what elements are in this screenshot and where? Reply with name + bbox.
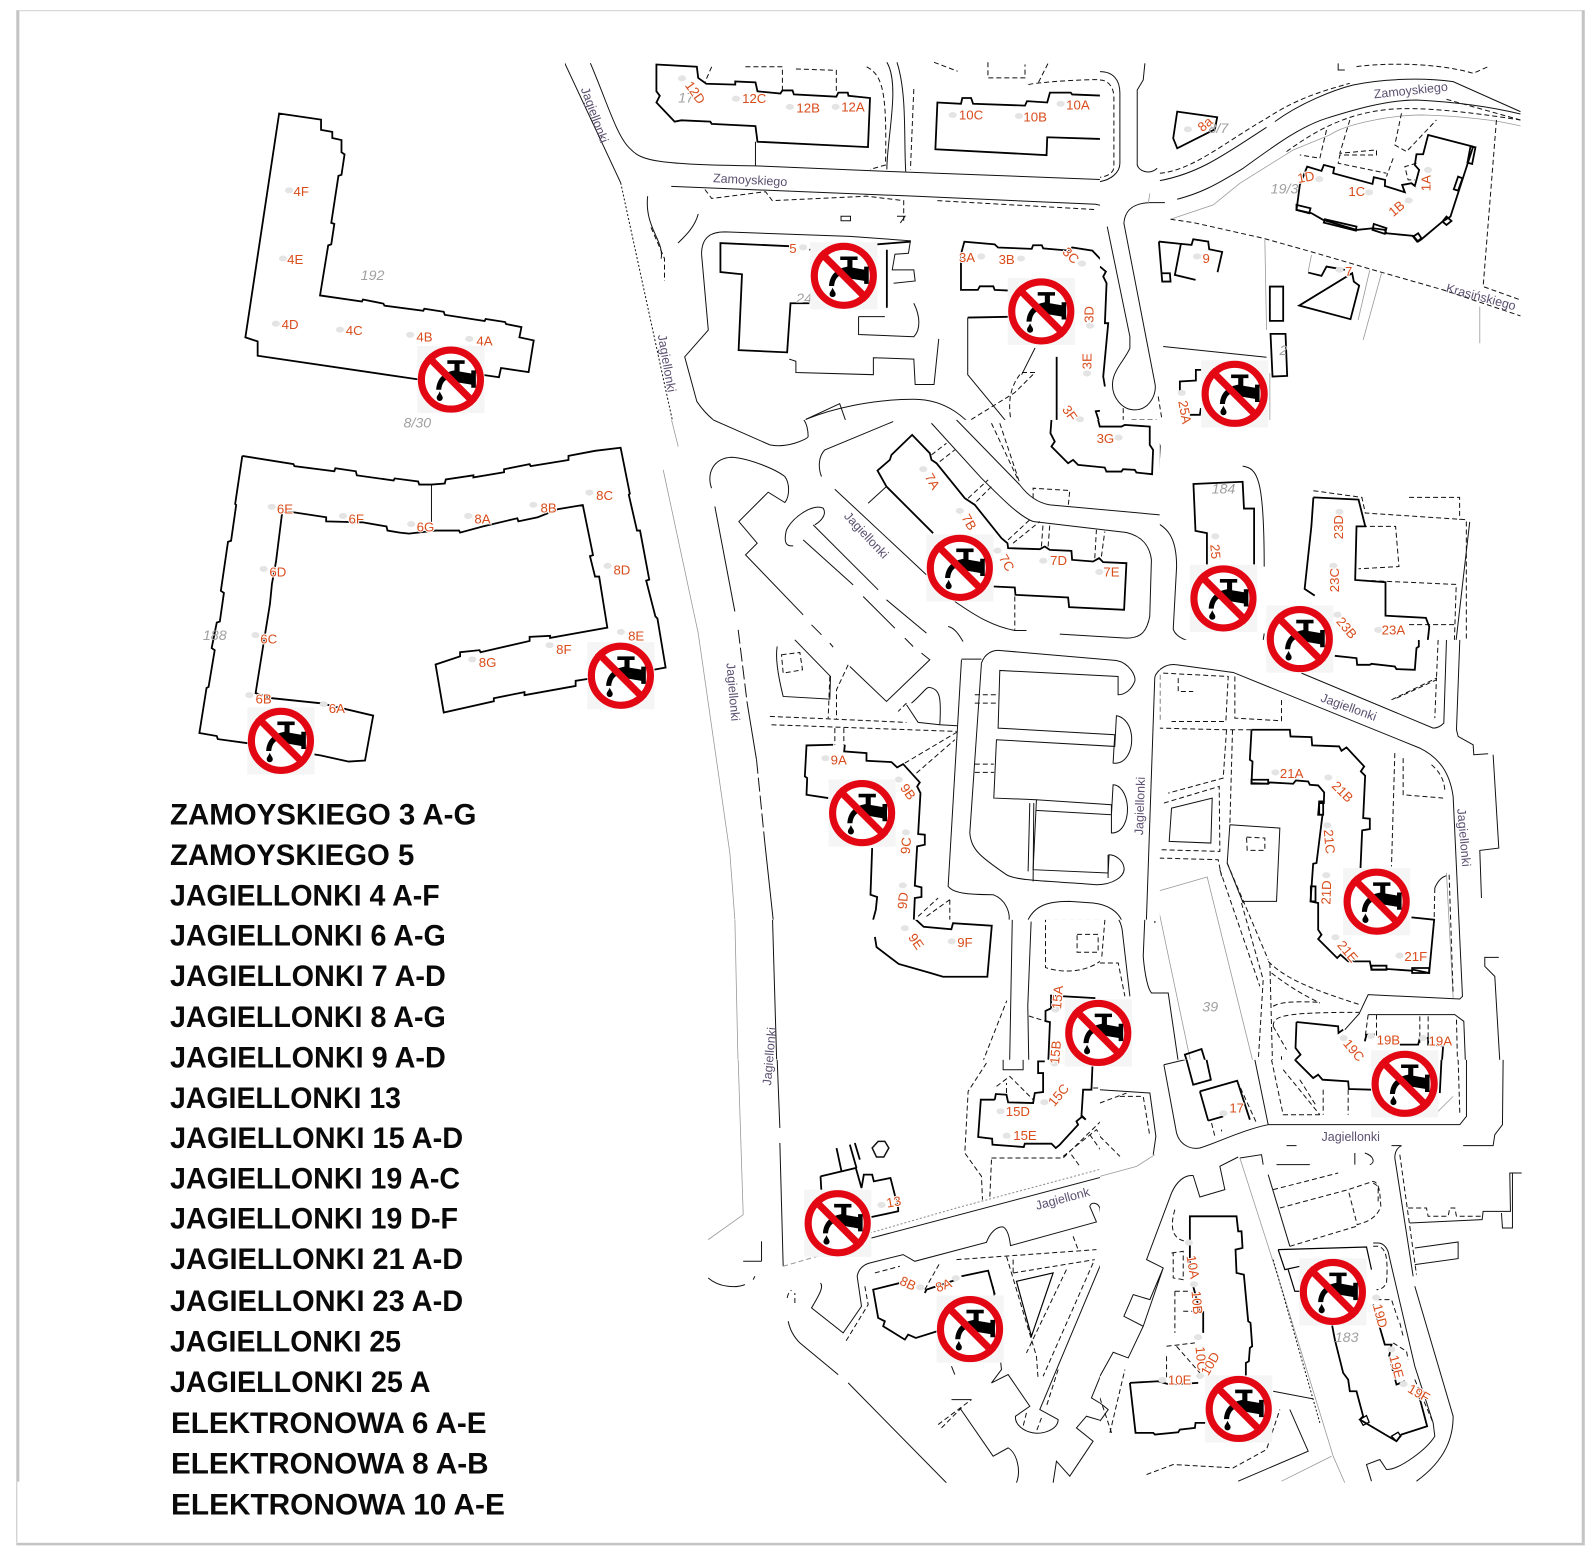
street names: Jagiellonk bbox=[1034, 1185, 1092, 1213]
icon: no water, Jagiellonki 25 bbox=[1190, 565, 1257, 632]
list of affected addresses: ELEKTRONOWA 6 A-E bbox=[171, 1407, 487, 1440]
entrance labels: estate map: 10D bbox=[1198, 1349, 1223, 1378]
entrance labels: estate map bbox=[682, 78, 1452, 1405]
entrance labels: estate map: 8B bbox=[897, 1273, 919, 1294]
list of affected addresses: JAGIELLONKI 6 A-G bbox=[170, 919, 446, 952]
panel: enlarged building Jagiellonki 4 bbox=[245, 113, 534, 379]
icon: no water, Jagiellonki 25A bbox=[1201, 360, 1268, 427]
entrance labels: estate map: 12D bbox=[682, 78, 708, 107]
street names: Jagiellonki bbox=[578, 85, 611, 145]
entrance labels: estate map: 23A bbox=[1382, 622, 1405, 637]
entrance labels: enlarged buildings: 6C bbox=[260, 632, 278, 647]
list of affected addresses: JAGIELLONKI 4 A-F bbox=[170, 880, 440, 913]
parcel numbers: 8/7 bbox=[1208, 121, 1229, 137]
list of affected addresses: JAGIELLONKI 7 A-D bbox=[170, 960, 446, 993]
entrance labels: enlarged buildings: 6D bbox=[269, 564, 286, 579]
icon: no water, Jagiellonki 6 bbox=[247, 707, 315, 774]
entrance labels: enlarged buildings: 4B bbox=[416, 329, 433, 344]
panel: enlarged buildings Jagiellonki 6 and 8 bbox=[199, 448, 666, 762]
entrance labels: estate map: 5 bbox=[789, 241, 797, 256]
icon: no water, Jagiellonki 4 bbox=[417, 346, 484, 413]
entrance labels: estate map: 9A bbox=[831, 753, 847, 768]
entrance labels: estate map: 23B bbox=[1333, 614, 1360, 642]
street names bbox=[578, 80, 1517, 1213]
icon: no water, Jagiellonki 21 bbox=[1343, 868, 1410, 935]
street names: Krasińskiego bbox=[1445, 281, 1517, 313]
entrance labels: estate map: 7A bbox=[922, 471, 943, 492]
building entrance markers bbox=[245, 75, 1432, 1387]
entrance labels: estate map: 3C bbox=[1060, 244, 1082, 267]
entrance labels: estate map: 8a bbox=[1195, 113, 1216, 135]
map: north section bbox=[564, 62, 1470, 640]
parcel numbers: 188 bbox=[203, 628, 227, 644]
parcel numbers: 17 bbox=[678, 91, 695, 107]
entrance labels: estate map: 21C bbox=[1321, 829, 1338, 855]
entrance labels: estate map: 19D bbox=[1370, 1302, 1391, 1330]
list of affected addresses: JAGIELLONKI 15 A-D bbox=[170, 1122, 463, 1155]
list of affected addresses: JAGIELLONKI 25 A bbox=[170, 1366, 431, 1399]
entrance labels: estate map: 25 bbox=[1207, 544, 1223, 560]
entrance labels: estate map: 10B bbox=[1023, 110, 1047, 125]
entrance labels: enlarged buildings: 4A bbox=[476, 333, 493, 348]
entrance labels: estate map: 3G bbox=[1097, 431, 1114, 446]
list of affected addresses: JAGIELLONKI 19 D-F bbox=[170, 1202, 458, 1235]
street names: Jagiellonki bbox=[723, 662, 742, 722]
entrance labels: estate map: 3B bbox=[999, 252, 1015, 267]
entrance labels: enlarged buildings: 6E bbox=[277, 501, 293, 516]
entrance labels: estate map: 13 bbox=[885, 1193, 902, 1211]
parcel numbers: 192 bbox=[361, 268, 384, 284]
entrance labels: enlarged buildings: 6F bbox=[349, 512, 364, 527]
entrance labels: estate map: 15E bbox=[1013, 1128, 1037, 1143]
entrance labels: estate map: 10C bbox=[959, 107, 984, 122]
list of affected addresses: JAGIELLONKI 23 A-D bbox=[170, 1285, 463, 1318]
entrance labels: enlarged buildings: 8E bbox=[628, 629, 644, 644]
map: band with Jagiellonki 15 and 9 E-F bbox=[734, 920, 1100, 1060]
street names: Jagiellonki bbox=[841, 509, 891, 561]
entrance labels: estate map: 3F bbox=[1059, 403, 1080, 424]
icon: no water, Jagiellonki 19 D-F bbox=[1299, 1258, 1366, 1326]
icon: no water, Elektronowa 8 bbox=[936, 1296, 1004, 1363]
entrance labels: estate map: 23D bbox=[1331, 515, 1346, 539]
map: central section with Jagiellonki 7 and 9 bbox=[663, 420, 1160, 920]
map: east section with Jagiellonki 21 and 19 A-C bbox=[1100, 640, 1501, 1090]
street names: Zamoyskiego bbox=[1373, 80, 1448, 101]
entrance labels: estate map: 21B bbox=[1329, 778, 1356, 805]
list of affected addresses: JAGIELLONKI 8 A-G bbox=[170, 1001, 446, 1034]
entrance labels: estate map: 19B bbox=[1377, 1033, 1400, 1048]
map: south-east section with Elektronowa 10 and Jagiellonki 19 D-F bbox=[1100, 1060, 1523, 1483]
entrance labels: estate map: 15B bbox=[1047, 1040, 1064, 1065]
entrance labels: estate map: 9D bbox=[895, 892, 911, 910]
entrance labels: estate map: 12A bbox=[841, 99, 865, 114]
entrance labels: enlarged buildings bbox=[256, 184, 644, 716]
street names: Zamoyskiego bbox=[713, 171, 788, 189]
parcel numbers: 39 bbox=[1202, 1000, 1218, 1016]
parcel numbers: 183 bbox=[1335, 1330, 1359, 1346]
street names: Jagiellonki bbox=[1322, 1130, 1380, 1144]
parcel numbers bbox=[203, 91, 1359, 1346]
entrance labels: estate map: 21E bbox=[1334, 938, 1361, 965]
map: north-east section bbox=[1100, 63, 1520, 436]
entrance labels: estate map: 9 bbox=[1202, 251, 1210, 266]
entrance labels: estate map: 1B bbox=[1385, 198, 1408, 220]
entrance labels: enlarged buildings: 6B bbox=[256, 692, 272, 707]
icon: no water, Jagiellonki 7 bbox=[926, 534, 993, 601]
entrance labels: enlarged buildings: 4C bbox=[346, 323, 363, 338]
entrance labels: estate map: 9E bbox=[905, 930, 927, 952]
entrance labels: enlarged buildings: 8B bbox=[541, 500, 557, 515]
entrance labels: estate map: 10A bbox=[1183, 1254, 1202, 1280]
entrance labels: estate map: 19C bbox=[1340, 1036, 1368, 1065]
street names: Jagiellonki bbox=[1132, 777, 1148, 835]
icon: no water, Zamoyskiego 5 bbox=[810, 242, 877, 309]
entrance labels: estate map: 3E bbox=[1080, 353, 1095, 369]
list of affected addresses: ELEKTRONOWA 10 A-E bbox=[171, 1488, 505, 1521]
entrance labels: enlarged buildings: 6A bbox=[329, 701, 345, 716]
icon: no water, Elektronowa 10 bbox=[1205, 1375, 1272, 1443]
icon: no water, Jagiellonki 9 bbox=[829, 780, 896, 847]
list of affected addresses: ZAMOYSKIEGO 3 A-G bbox=[170, 798, 476, 831]
entrance labels: estate map: 8A bbox=[933, 1275, 954, 1295]
entrance labels: estate map: 21A bbox=[1280, 766, 1304, 781]
entrance labels: enlarged buildings: 4D bbox=[282, 317, 299, 332]
entrance labels: estate map: 15D bbox=[1006, 1104, 1030, 1119]
icon: no water, Jagiellonki 19 A-C bbox=[1371, 1050, 1438, 1117]
entrance labels: estate map: 15A bbox=[1049, 985, 1066, 1010]
icon: no water, Jagiellonki 8 bbox=[587, 642, 654, 709]
icon: no water, Jagiellonki 13 bbox=[804, 1190, 871, 1257]
entrance labels: estate map: 3A bbox=[959, 250, 975, 265]
entrance labels: estate map: 19F bbox=[1405, 1381, 1433, 1405]
icon: no water, Jagiellonki 15 bbox=[1065, 999, 1132, 1067]
list of affected addresses: JAGIELLONKI 13 bbox=[170, 1082, 401, 1115]
entrance labels: estate map: 10C bbox=[1193, 1346, 1210, 1372]
entrance labels: enlarged buildings: 4E bbox=[287, 252, 303, 267]
entrance labels: estate map: 7B bbox=[958, 511, 980, 533]
list of affected addresses: JAGIELLONKI 9 A-D bbox=[170, 1042, 446, 1075]
map: estate roads, paths and buildings bbox=[565, 62, 1523, 1483]
list of affected addresses: JAGIELLONKI 25 bbox=[170, 1325, 401, 1358]
entrance labels: enlarged buildings: 6G bbox=[417, 520, 434, 535]
parcel numbers: 24 bbox=[795, 291, 812, 307]
entrance labels: estate map: 7E bbox=[1103, 564, 1120, 579]
entrance labels: estate map: 21F bbox=[1404, 949, 1427, 964]
parcel numbers: 8/30 bbox=[403, 415, 431, 431]
parcel numbers: 184 bbox=[1212, 482, 1235, 498]
list of affected addresses: ELEKTRONOWA 8 A-B bbox=[171, 1448, 489, 1481]
street names: Jagiellonki bbox=[1319, 691, 1378, 724]
entrance labels: estate map: 9B bbox=[897, 781, 919, 803]
street names: Jagiellonki bbox=[1454, 808, 1473, 867]
entrance labels: enlarged buildings: 8C bbox=[596, 488, 614, 503]
entrance labels: enlarged buildings: 4F bbox=[294, 184, 309, 199]
parcel numbers: 2 bbox=[1279, 343, 1288, 359]
entrance labels: estate map: 9C bbox=[898, 836, 914, 855]
entrance labels: estate map: 10B bbox=[1189, 1290, 1206, 1315]
street names: Jagiellonki bbox=[760, 1027, 779, 1086]
entrance labels: estate map: 23C bbox=[1327, 568, 1342, 592]
entrance labels: estate map: 10E bbox=[1168, 1372, 1192, 1387]
entrance labels: estate map: 7C bbox=[996, 552, 1018, 574]
entrance labels: estate map: 12C bbox=[742, 91, 767, 106]
entrance labels: estate map: 19E bbox=[1386, 1353, 1407, 1380]
entrance labels: estate map: 25A bbox=[1175, 399, 1194, 425]
entrance labels: enlarged buildings: 8A bbox=[474, 512, 491, 527]
list of affected addresses: ZAMOYSKIEGO 5 bbox=[170, 839, 414, 872]
entrance labels: estate map: 3D bbox=[1082, 306, 1097, 323]
icon: no water, Jagiellonki 23 bbox=[1266, 606, 1333, 673]
entrance labels: estate map: 1D bbox=[1296, 168, 1316, 186]
entrance labels: enlarged buildings: 8F bbox=[556, 642, 572, 657]
entrance labels: enlarged buildings: 8G bbox=[479, 655, 496, 670]
entrance labels: estate map: 12B bbox=[796, 100, 820, 115]
parcel numbers: 19/3 bbox=[1271, 181, 1298, 197]
list of affected addresses bbox=[170, 798, 505, 1521]
entrance labels: enlarged buildings: 8D bbox=[613, 562, 630, 577]
entrance labels: estate map: 7 bbox=[1345, 264, 1352, 279]
entrance labels: estate map: 15C bbox=[1045, 1081, 1072, 1109]
list of affected addresses: JAGIELLONKI 19 A-C bbox=[170, 1163, 460, 1196]
street names: Jagiellonki bbox=[655, 333, 679, 393]
entrance labels: estate map: 21D bbox=[1318, 880, 1334, 905]
entrance labels: estate map: 7D bbox=[1050, 553, 1067, 568]
map: south-west section with Jagiellonki 13 and Elektronowa 8 bbox=[708, 1060, 1133, 1483]
list of affected addresses: JAGIELLONKI 21 A-D bbox=[170, 1243, 463, 1276]
icon: no water, Zamoyskiego 3 bbox=[1008, 278, 1075, 345]
entrance labels: estate map: 19A bbox=[1429, 1034, 1452, 1049]
entrance labels: estate map: 1A bbox=[1419, 175, 1434, 191]
entrance labels: estate map: 10A bbox=[1066, 97, 1090, 112]
entrance labels: estate map: 17 bbox=[1229, 1101, 1244, 1116]
entrance labels: estate map: 1C bbox=[1348, 184, 1366, 199]
entrance labels: estate map: 9F bbox=[957, 935, 973, 950]
